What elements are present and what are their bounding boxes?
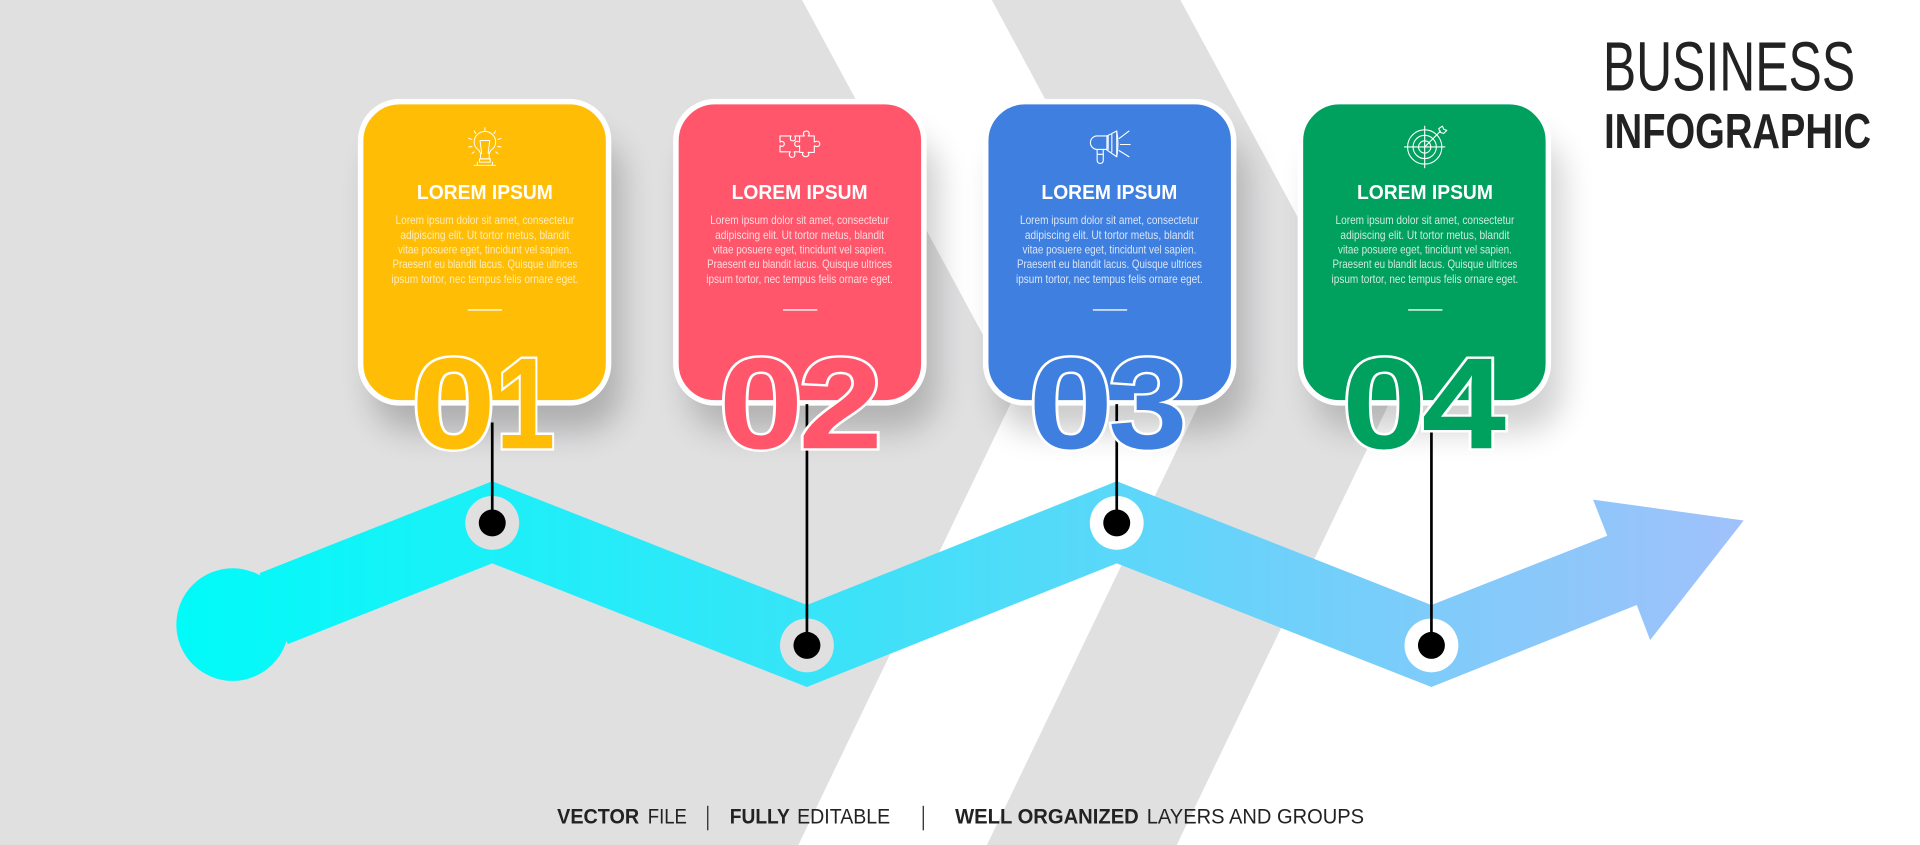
panel: card 01 <box>361 102 622 431</box>
panel: card 02 <box>676 102 938 431</box>
icon: megaphone <box>1090 131 1130 163</box>
background chevron: right grey <box>987 0 1393 845</box>
card heading: LOREM IPSUM <box>1357 182 1493 204</box>
card body text: adipiscing elit. Ut tortor metus, blandit <box>1340 228 1510 242</box>
card body text: vitae posuere eget, tincidunt vel sapien. <box>398 242 572 257</box>
marker: step 2 <box>780 618 834 672</box>
card heading: LOREM IPSUM <box>732 182 868 204</box>
background chevron: left grey <box>0 0 1015 845</box>
card body text: Lorem ipsum dolor sit amet, consectetur <box>1020 213 1199 227</box>
footer tagline: WELL ORGANIZED <box>955 806 1139 829</box>
card body text: vitae posuere eget, tincidunt vel sapien. <box>713 242 887 257</box>
footer tagline: FULLY <box>730 806 790 829</box>
card body text <box>1332 213 1518 286</box>
footer tagline <box>557 806 1364 830</box>
card body text: ipsum tortor, nec tempus felis ornare eget. <box>1016 272 1203 286</box>
footer tagline: VECTOR <box>557 806 639 829</box>
card body text: adipiscing elit. Ut tortor metus, blandit <box>715 228 885 242</box>
card body text: vitae posuere eget, tincidunt vel sapien. <box>1338 242 1512 257</box>
number 04: 0 <box>1342 331 1426 476</box>
number 04 <box>1342 331 1506 476</box>
number 01: 1 <box>496 332 555 477</box>
card body text: ipsum tortor, nec tempus felis ornare eget. <box>392 272 578 286</box>
number 01: 0 <box>411 331 496 476</box>
footer tagline: EDITABLE <box>797 806 890 829</box>
marker: step 1 <box>465 496 519 550</box>
card body text: Praesent eu blandit lacus. Quisque ultrices <box>1332 257 1517 271</box>
number 02 <box>719 331 883 476</box>
card body text: Lorem ipsum dolor sit amet, consectetur <box>710 213 889 227</box>
title <box>1603 28 1871 159</box>
icon: light bulb <box>469 128 501 165</box>
connector lines <box>492 404 1431 645</box>
icon: target with arrow <box>1404 126 1447 168</box>
number 03 <box>1029 330 1188 476</box>
card body text: Praesent eu blandit lacus. Quisque ultrices <box>1017 257 1202 271</box>
card body text: Praesent eu blandit lacus. Quisque ultrices <box>707 257 892 271</box>
card body text: adipiscing elit. Ut tortor metus, blandit <box>400 228 570 242</box>
marker: step 3 <box>1090 496 1144 550</box>
card body text: Lorem ipsum dolor sit amet, consectetur <box>1336 213 1514 227</box>
panel: card 03 <box>986 102 1248 431</box>
number 03: 0 <box>1029 331 1113 476</box>
number 02: 0 <box>719 331 803 476</box>
number 04: 4 <box>1422 331 1506 476</box>
card body text <box>1016 213 1203 286</box>
number 01 <box>411 331 555 477</box>
card body text: Lorem ipsum dolor sit amet, consectetur <box>396 213 574 227</box>
card heading: LOREM IPSUM <box>1041 182 1177 204</box>
icon: puzzle pieces <box>780 131 820 157</box>
marker: step 4 <box>1404 618 1458 672</box>
card body text: Praesent eu blandit lacus. Quisque ultrices <box>392 257 577 271</box>
number 02: 2 <box>798 331 883 476</box>
card body text <box>392 213 578 286</box>
card body text: adipiscing elit. Ut tortor metus, blandit <box>1025 228 1194 242</box>
number 03: 3 <box>1108 330 1188 476</box>
footer tagline: LAYERS AND GROUPS <box>1147 806 1364 829</box>
card body text: ipsum tortor, nec tempus felis ornare eget. <box>1332 272 1518 286</box>
card body text: vitae posuere eget, tincidunt vel sapien. <box>1022 242 1196 257</box>
arrow: zigzag ribbon with round start <box>176 481 1744 687</box>
footer tagline: FILE <box>648 806 687 829</box>
card body text: ipsum tortor, nec tempus felis ornare eget. <box>706 272 893 286</box>
card heading: LOREM IPSUM <box>417 182 553 204</box>
panel: card 04 <box>1300 102 1562 431</box>
card body text <box>706 213 893 286</box>
